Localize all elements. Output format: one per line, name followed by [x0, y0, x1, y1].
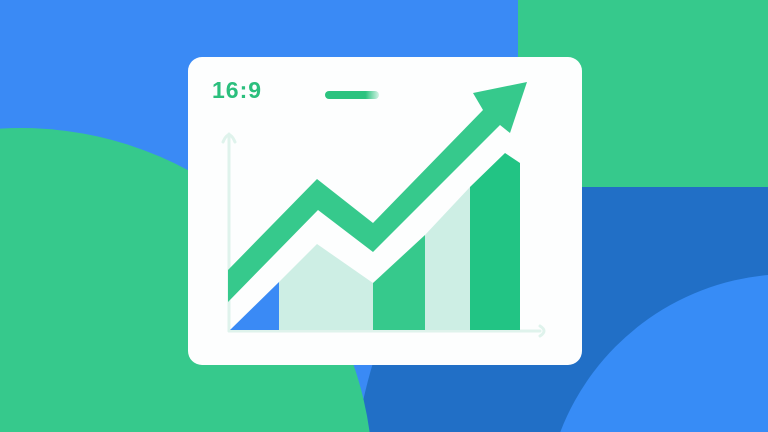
- bars: [230, 153, 520, 330]
- arrow: growth trend: [228, 82, 527, 302]
- label: 16:9: 16:9: [212, 77, 262, 103]
- axes: [223, 134, 544, 336]
- card: chart panel: [188, 57, 582, 365]
- dash indicator: [325, 91, 379, 99]
